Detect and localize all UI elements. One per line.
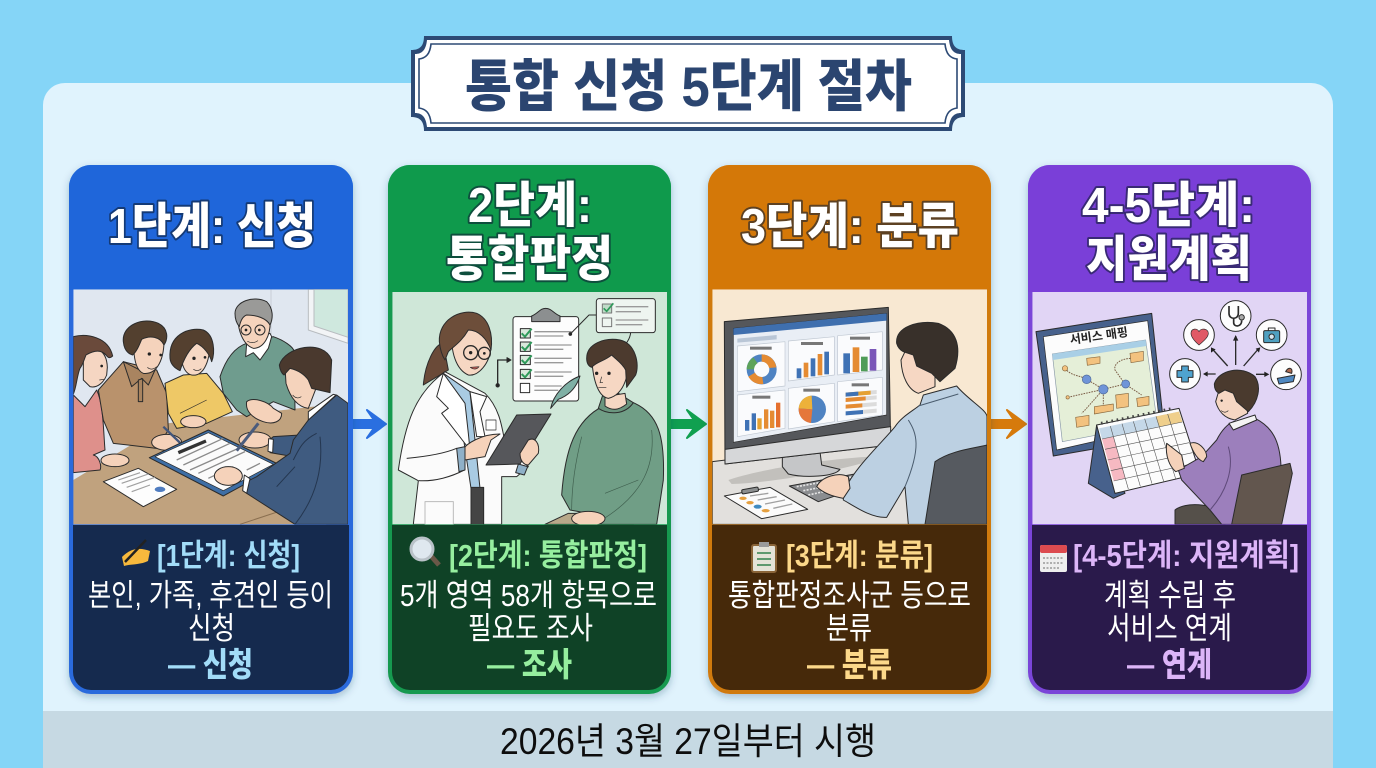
step 1 description: 본인, 가족, 후견인 등이 xyxy=(88,578,333,613)
panel: step 2 integrated assessment xyxy=(388,165,671,694)
footer bar xyxy=(43,711,1333,768)
donut chart xyxy=(750,358,773,381)
arrows from planner xyxy=(1204,336,1268,374)
panel: step 4-5 support plan xyxy=(1028,165,1311,694)
analyst xyxy=(843,386,987,524)
man in brown shirt xyxy=(98,362,168,448)
step 3 description: [3단계: 분류] xyxy=(786,538,933,573)
step 1 description: 신청 xyxy=(188,611,235,646)
bar chart two xyxy=(797,368,801,378)
footer date text: 2026년 3월 27일부터 시행 xyxy=(500,721,876,762)
older man in green sweater xyxy=(220,337,295,417)
step 4-5 description: — 연계 xyxy=(1127,646,1212,683)
step 1 description: — 신청 xyxy=(168,646,253,683)
chair xyxy=(1232,463,1292,524)
service icons xyxy=(1170,301,1301,390)
step 2 description: 필요도 조사 xyxy=(468,611,593,646)
icon: clipboard xyxy=(752,542,776,572)
step 2 description: 5개 영역 58개 항목으로 xyxy=(400,578,657,613)
step 4-5 description xyxy=(1032,525,1307,690)
pie chart xyxy=(799,396,826,423)
clipboard on desk xyxy=(724,487,808,519)
calendar stand xyxy=(1088,425,1125,498)
application clipboard xyxy=(149,430,280,496)
step 2 heading xyxy=(388,165,671,292)
step 2 description: — 조사 xyxy=(487,646,572,683)
woman in yellow sweater xyxy=(165,373,232,428)
panel: step 1 application xyxy=(69,165,353,694)
step 4-5 heading: 지원계획 xyxy=(1086,233,1252,287)
step 3 heading xyxy=(708,165,991,290)
client xyxy=(545,513,633,524)
monitor xyxy=(782,452,840,476)
title text: 통합 신청 5단계 절차 xyxy=(465,55,912,118)
step 4-5 heading: 4-5단계: xyxy=(1082,179,1255,233)
detail box xyxy=(596,299,655,333)
keyboard xyxy=(788,474,854,502)
icon: calendar xyxy=(1040,545,1067,572)
step 1 description: [1단계: 신청] xyxy=(157,538,300,573)
step 4-5 description: [4-5단계: 지원계획] xyxy=(1073,538,1299,573)
step 2 heading: 2단계: xyxy=(468,179,592,233)
step 2 heading: 통합판정 xyxy=(446,233,613,287)
step 3 heading: 3단계: 분류 xyxy=(741,200,959,254)
panel: step 3 classification xyxy=(708,165,991,694)
left woman xyxy=(73,390,105,473)
doctor xyxy=(423,343,448,385)
bar chart three xyxy=(843,353,850,373)
title plaque xyxy=(411,36,965,131)
bar chart four xyxy=(745,420,749,431)
step 4-5 description: 계획 수립 후 xyxy=(1104,578,1236,613)
chair xyxy=(925,445,987,524)
step 4-5 illustration: planning with service map: 서비스 매핑 xyxy=(1069,324,1129,347)
step 4-5 illustration: planning with service map xyxy=(1032,292,1307,524)
step 2 description xyxy=(392,525,667,690)
step 3 description: — 분류 xyxy=(807,646,892,683)
step 3 description xyxy=(712,525,987,690)
step 1 heading xyxy=(69,165,353,290)
step 2 illustration: doctor assessing a client xyxy=(392,292,667,527)
arrow: step 1 to step 2 xyxy=(353,410,386,438)
man in suit xyxy=(326,524,348,525)
step 2 description: [2단계: 통합판정] xyxy=(449,538,647,573)
arrow: step 2 to step 3 xyxy=(671,410,706,438)
step 1 illustration: family signing an application xyxy=(73,289,348,524)
arrow: step 3 to step 4 xyxy=(991,410,1026,438)
horizontal bars xyxy=(860,390,877,394)
tablet xyxy=(486,414,551,465)
small paper xyxy=(103,468,177,507)
step 1 description xyxy=(73,525,349,690)
step 3 illustration: analyst at dashboard xyxy=(712,289,987,524)
step 4-5 description: 서비스 연계 xyxy=(1107,611,1232,646)
icon: magnifying glass xyxy=(411,538,439,565)
step 3 description: 통합판정조사군 등으로 xyxy=(728,578,971,613)
step 3 description: 분류 xyxy=(826,611,872,646)
service map board xyxy=(1036,313,1165,456)
planner xyxy=(1175,505,1225,524)
step 1 heading: 1단계: 신청 xyxy=(108,200,316,254)
clipboard checklist xyxy=(513,317,579,401)
step 4-5 heading xyxy=(1028,165,1311,292)
icon: writing hand xyxy=(122,540,150,566)
